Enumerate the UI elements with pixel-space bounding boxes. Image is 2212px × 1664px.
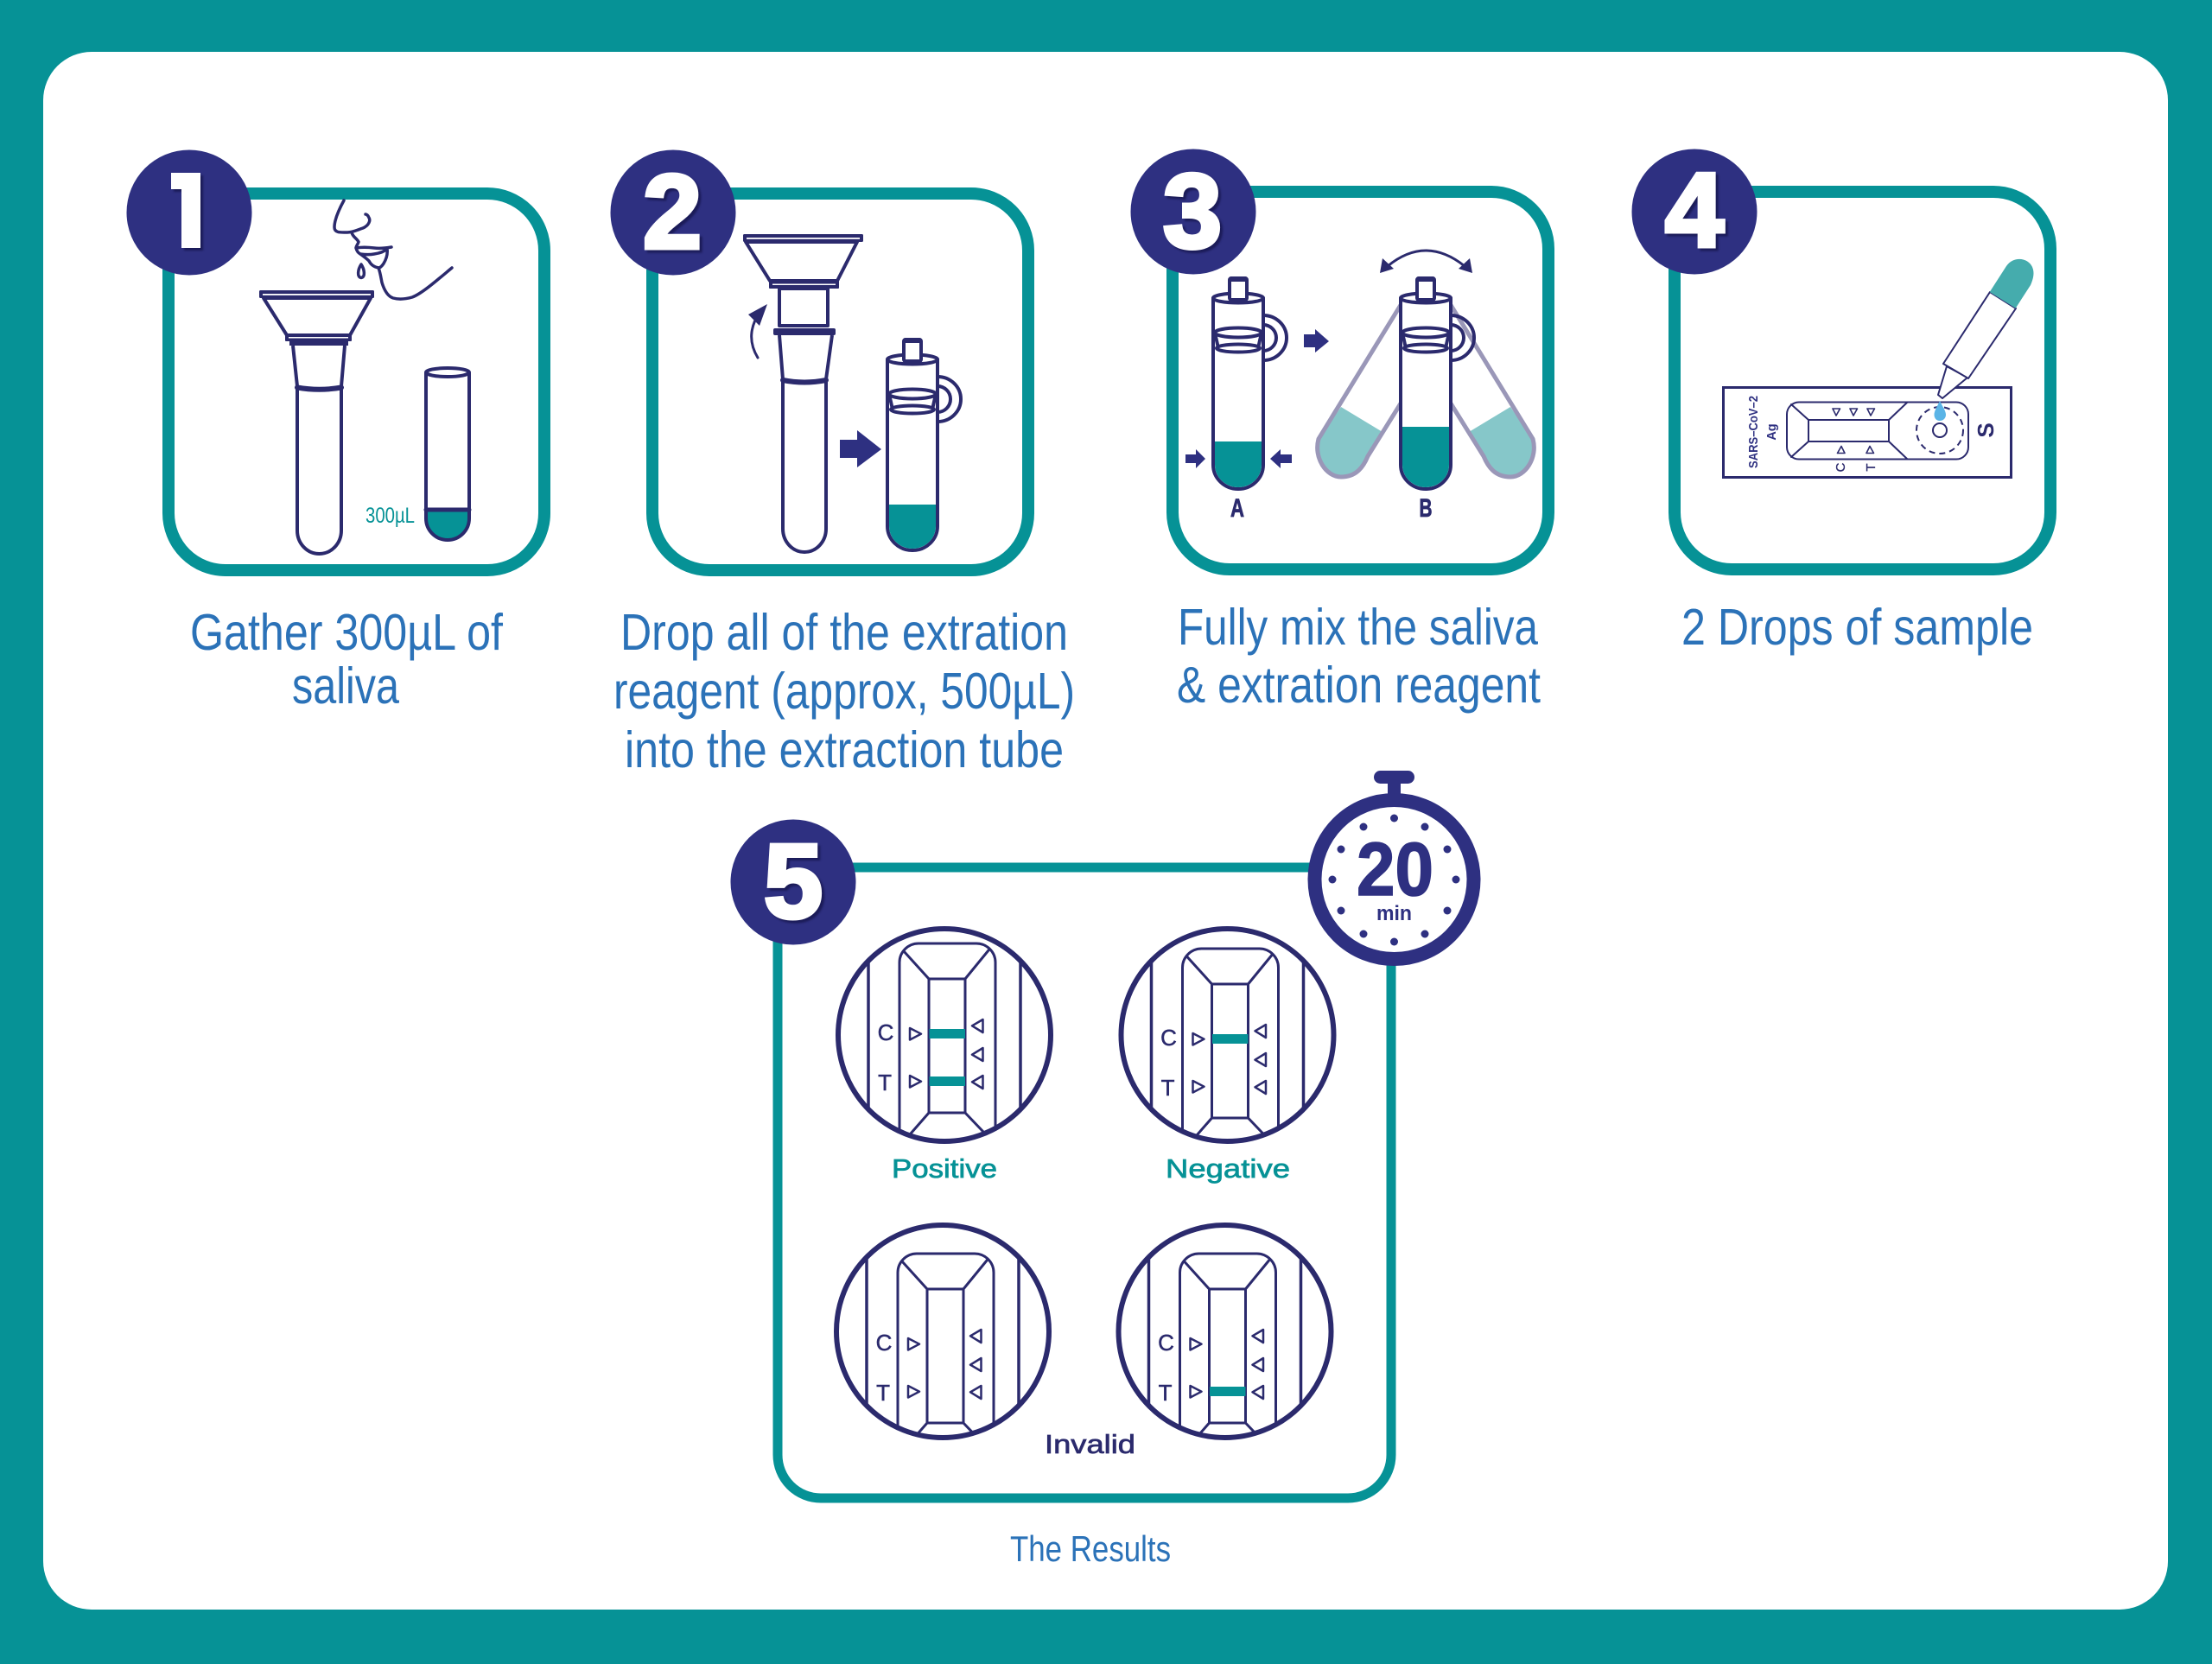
result: invalid cassette no lines: C [876, 1330, 892, 1356]
icon: arrow to tube B [1304, 329, 1329, 352]
icon: swing arrow [1380, 251, 1472, 273]
result: invalid cassette no lines [836, 1210, 1049, 1452]
icon: test cassette: SARS–CoV–2 [1747, 396, 1761, 468]
step 2 badge [610, 150, 736, 275]
icon: collection tube with 300 microlitres [426, 368, 469, 540]
icon: tube A [1213, 276, 1287, 489]
result: positive cassette: C [878, 1019, 893, 1045]
label: negative: Negative [1166, 1153, 1290, 1184]
step 1 badge [126, 150, 252, 275]
label B: B [1419, 494, 1433, 523]
icon: funnel collector [259, 290, 374, 554]
label A: A [1230, 494, 1244, 523]
step 5 frame [778, 867, 1391, 1498]
panel: step 1 gather saliva [126, 150, 544, 715]
step 5 caption: The Results [1010, 1528, 1171, 1569]
step 1 badge: 1 [160, 153, 219, 270]
result: invalid cassette test line only: C [1158, 1330, 1174, 1356]
step 1 caption [190, 604, 504, 715]
step 5 badge: 5 [764, 822, 823, 940]
step 1 frame [168, 194, 544, 570]
result: invalid cassette no lines: T [876, 1380, 890, 1406]
step 2 caption: Drop all of the extration [620, 604, 1068, 661]
icon: 20 minute stopwatch: 20 [1357, 828, 1433, 911]
step 2 caption: into the extraction tube [625, 721, 1064, 778]
icon: extraction tube with reagent [887, 338, 961, 550]
icon: 20 minute stopwatch [1315, 771, 1474, 959]
step 3 caption: & extration reagent [1177, 657, 1541, 714]
step 4 badge: 4 [1665, 151, 1724, 269]
volume label: 300µL [365, 504, 415, 528]
icon: test cassette: C [1834, 462, 1848, 472]
label: invalid: Invalid [1045, 1429, 1135, 1459]
panel: step 4 add drops [1631, 149, 2050, 656]
step 3 caption [1177, 599, 1541, 714]
result: negative cassette [1122, 905, 1334, 1147]
icon: 20 minute stopwatch: min [1376, 902, 1412, 925]
panel: step 3 mix [1130, 149, 1548, 714]
icon: test cassette: Ag [1765, 423, 1779, 441]
step 4 caption: 2 Drops of sample [1681, 599, 2033, 656]
step 1 caption: Gather 300µL of [190, 604, 504, 661]
step 5 badge [731, 819, 855, 945]
step 4 badge [1631, 149, 1758, 275]
result: invalid cassette test line only [1118, 1210, 1331, 1452]
result: negative cassette: T [1161, 1075, 1175, 1101]
icon: funnel removed from tube [743, 234, 863, 552]
panel: step 5 results [731, 771, 1474, 1569]
result: negative cassette: C [1160, 1025, 1177, 1051]
result: invalid cassette test line only: T [1159, 1380, 1173, 1406]
icon: big arrow to extraction tube [840, 430, 881, 467]
icon: saliva drop [359, 264, 364, 278]
icon: tube B [1401, 276, 1474, 489]
icon: test cassette: S [1973, 422, 1999, 438]
step 3 caption: Fully mix the saliva [1178, 599, 1538, 656]
icon: test cassette [1723, 387, 2012, 477]
panel: step 2 drop reagent [610, 150, 1075, 778]
step 3 frame [1173, 192, 1548, 569]
icon: squeeze arrows [1185, 449, 1292, 468]
step 2 caption: reagent (approx, 500µL) [613, 663, 1075, 720]
icon: sample drop [1934, 401, 1946, 421]
result: positive cassette [838, 900, 1051, 1142]
step 2 badge: 2 [643, 153, 702, 270]
label: positive: Positive [892, 1153, 997, 1184]
step 2 frame [652, 194, 1028, 570]
icon: face spitting [334, 200, 452, 299]
icon: test cassette: T [1864, 463, 1878, 472]
icon: dropper pipette [1938, 259, 2033, 398]
step 2 caption [613, 604, 1075, 778]
result: positive cassette: T [878, 1070, 892, 1096]
icon: curved arrow up [748, 304, 767, 358]
step 3 badge [1130, 149, 1256, 275]
step 1 caption: saliva [292, 657, 399, 715]
icon: tilted ghost tube right [1451, 305, 1534, 477]
icon: tilted ghost tube left [1318, 305, 1401, 477]
step 4 frame [1675, 192, 2050, 569]
step 3 badge: 3 [1163, 152, 1222, 270]
